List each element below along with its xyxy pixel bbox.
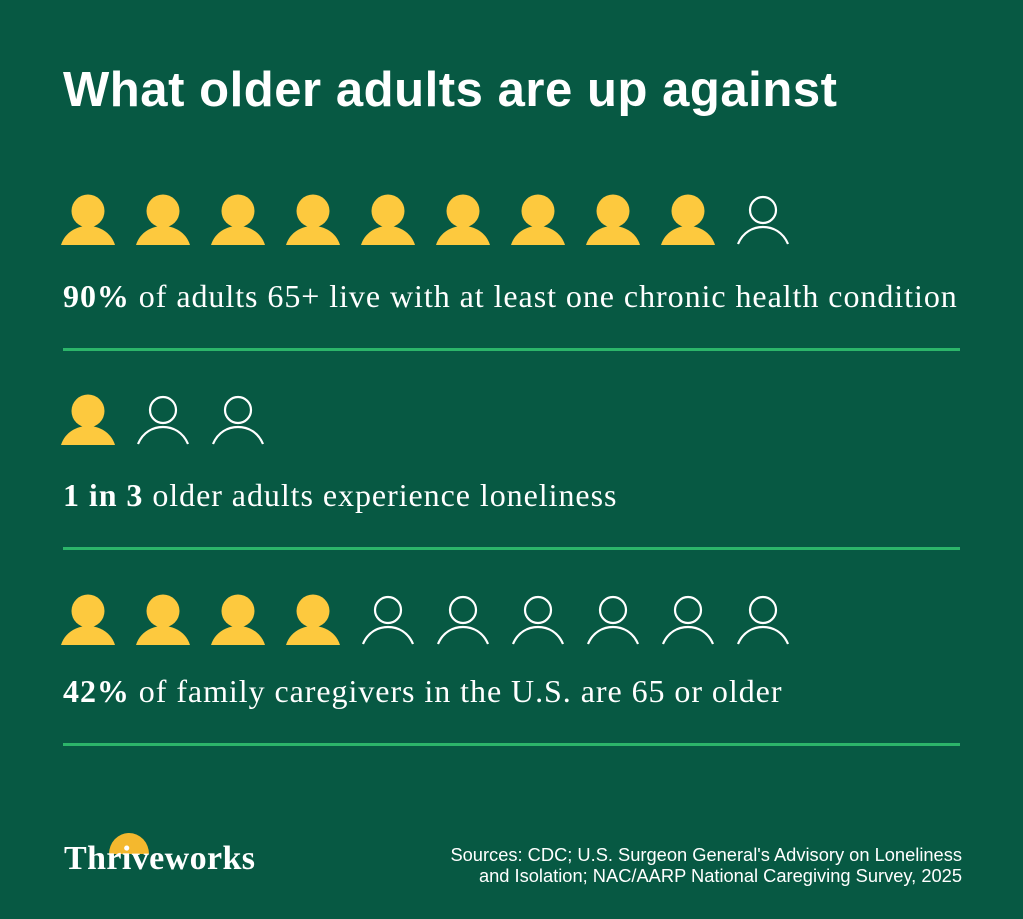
icon row 1: 9 of 10 filled xyxy=(61,194,789,245)
sources xyxy=(450,844,962,886)
sources: Sources: CDC; U.S. Surgeon General's Advisory on Loneliness xyxy=(450,844,962,865)
icon: sun xyxy=(109,833,149,854)
icon row 2: 1 of 3 filled xyxy=(61,394,264,445)
logo: Thriveworks: Thriveworks xyxy=(64,840,255,877)
stat text 2: 1 in 3 older adults experience loneliness xyxy=(63,477,617,513)
stat text 3: 42% of family caregivers in the U.S. are 65 or older xyxy=(63,673,782,709)
title: What older adults are up against xyxy=(63,63,838,117)
stat text 1: 90% of adults 65+ live with at least one chronic health condition xyxy=(63,278,958,314)
icon row 3: 4 of 10 filled xyxy=(61,594,789,645)
sources: and Isolation; NAC/AARP National Caregiving Survey, 2025 xyxy=(479,865,962,886)
